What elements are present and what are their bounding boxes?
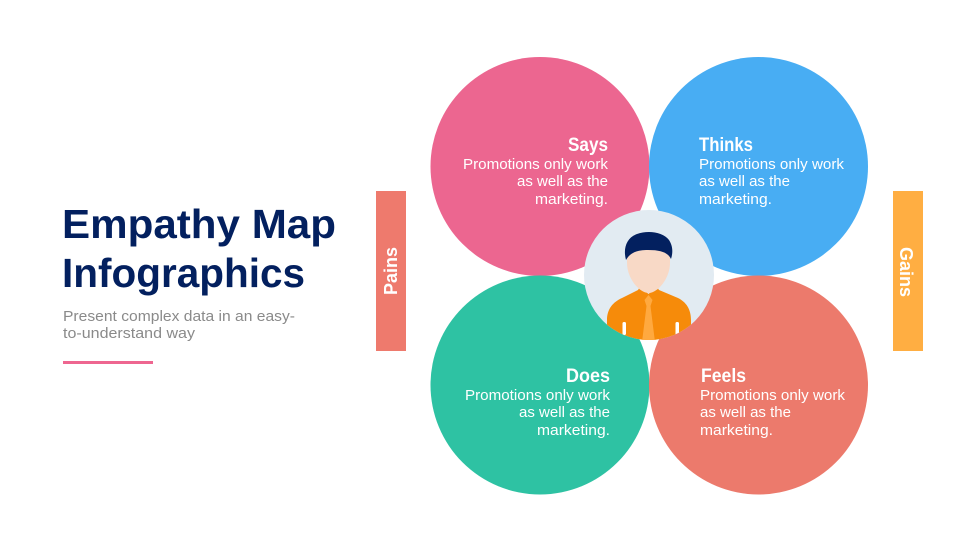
panel: thinks [649,57,868,276]
subtitle [63,308,295,342]
panel: feels: as well as the [700,404,791,421]
panel: gains: Gains [896,247,916,297]
panel: says [430,57,650,276]
panel: does: Promotions only work [465,387,611,404]
subtitle: to-understand way [63,325,196,342]
panel: says: Says [568,135,608,156]
panel: says: marketing. [535,191,608,208]
icon: person avatar [584,210,714,345]
panel: does [430,276,650,494]
title [62,201,336,296]
panel: gains [893,191,923,351]
title: Empathy Map [62,201,336,247]
panel: thinks: Promotions only work [699,156,845,173]
panel: does: Does [566,366,610,387]
subtitle: Present complex data in an easy- [63,308,295,325]
panel: feels: Promotions only work [700,387,846,404]
panel: pains: Pains [381,247,401,295]
panel: does: marketing. [537,422,610,439]
panel: thinks: marketing. [699,191,772,208]
title: Infographics [62,250,305,296]
panel: thinks: as well as the [699,173,790,190]
panel: pains [376,191,406,351]
panel: says: as well as the [517,173,608,190]
panel: does: as well as the [519,404,610,421]
panel: feels [649,276,868,494]
panel: feels: marketing. [700,422,773,439]
panel: thinks: Thinks [699,135,753,156]
accent underline [63,361,153,364]
panel: feels: Feels [701,366,746,387]
panel: says: Promotions only work [463,156,609,173]
